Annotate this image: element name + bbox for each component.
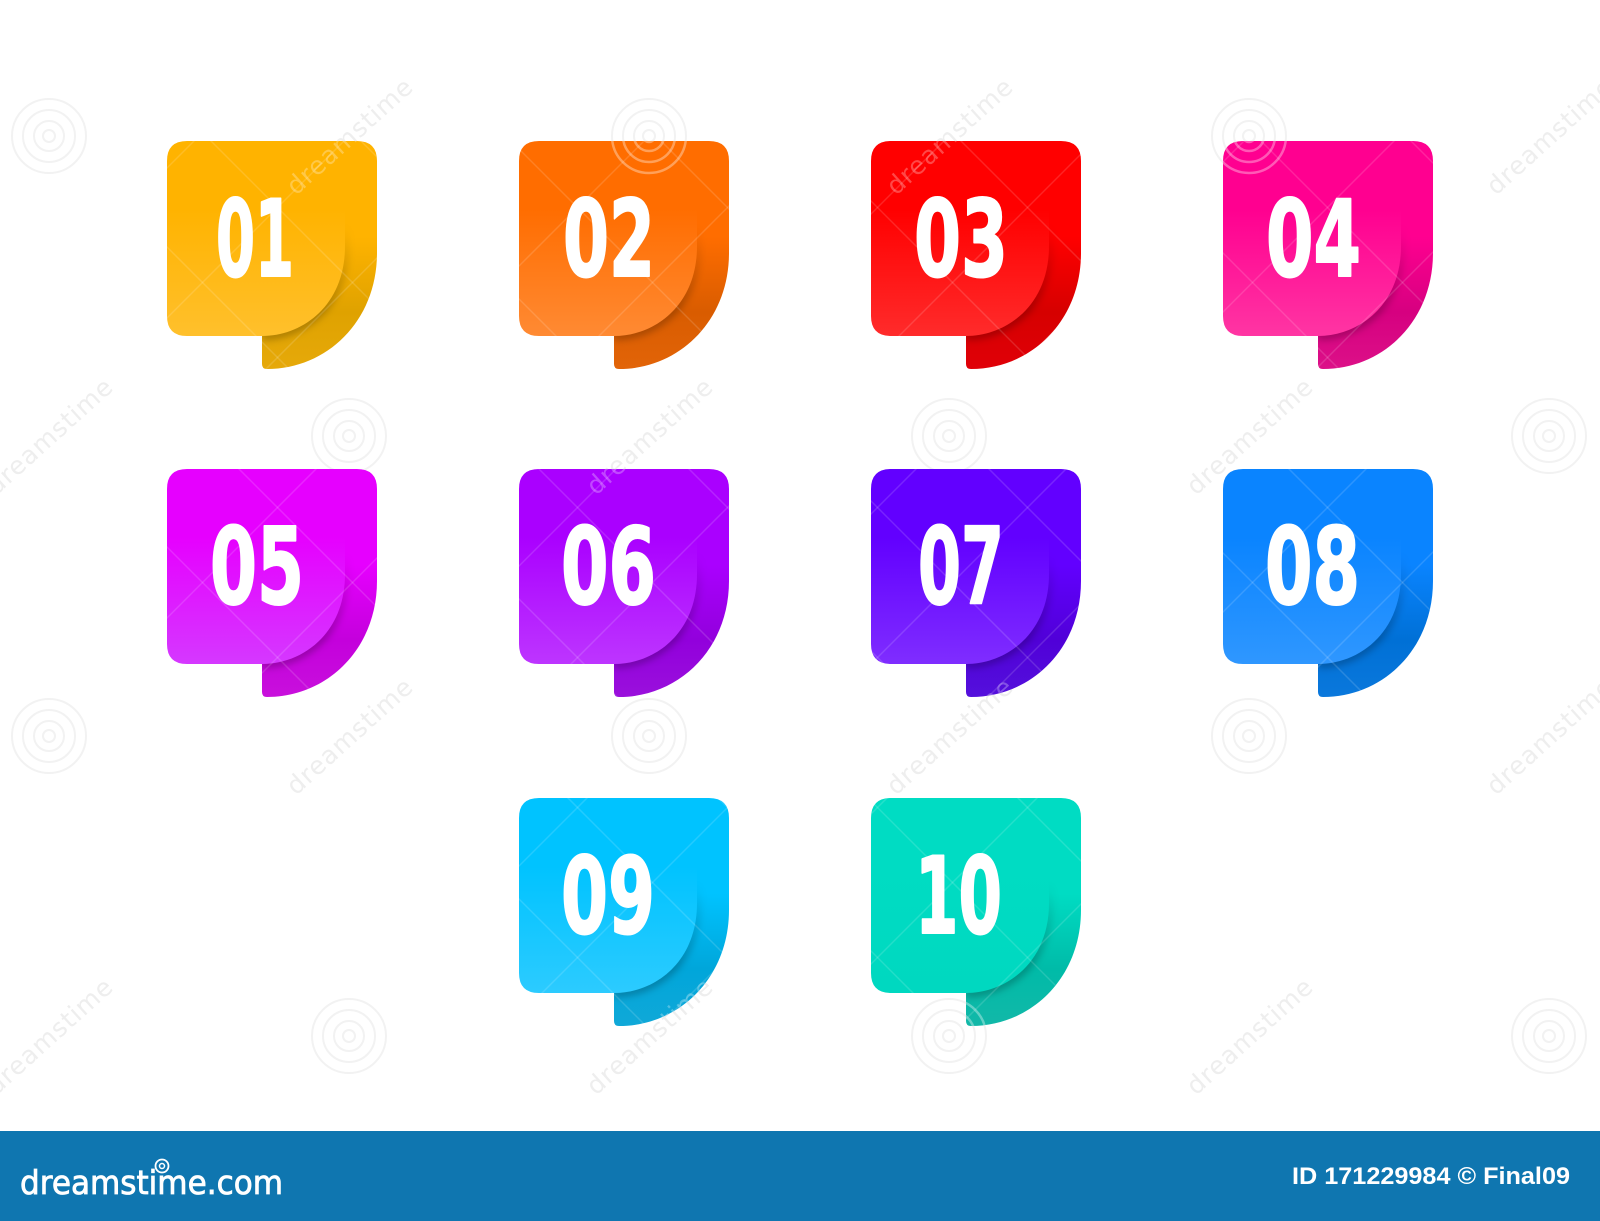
badge 09: [519, 798, 729, 1026]
background watermark: diagonal text: dreamstime: [1181, 372, 1319, 500]
badge 01: 01: [216, 178, 294, 301]
badge 10: 10: [915, 835, 1002, 958]
background watermark: diagonal text: dreamstime: [881, 72, 1019, 200]
badge 05: 05: [210, 506, 304, 628]
background watermark: diagonal text: dreamstime: [1181, 972, 1319, 1100]
footer bar: [0, 1131, 1600, 1221]
badge 02: [519, 141, 729, 369]
badge 06: 06: [561, 506, 656, 628]
badge 04: 04: [1266, 178, 1361, 301]
badge 02: 02: [563, 178, 655, 301]
badge 06: [519, 469, 729, 697]
background watermark: diagonal text: dreamstime: [581, 972, 719, 1100]
badge 05: [167, 469, 377, 697]
watermark overlay on badges: [167, 141, 1433, 1026]
badge 08: [1223, 469, 1433, 697]
background watermark: diagonal text: dreamstime: [881, 672, 1019, 800]
background watermark: diagonal text: dreamstime: [281, 672, 419, 800]
badge 04: [1223, 141, 1433, 369]
badge 03: 03: [914, 178, 1008, 301]
background watermark: diagonal text: dreamstime: [581, 372, 719, 500]
badge 07: 07: [918, 506, 1004, 628]
watermark overlay on badges: dreamstime: [281, 72, 419, 200]
badge 03: [871, 141, 1081, 369]
badge 01: [167, 141, 377, 369]
badge 10: [871, 798, 1081, 1026]
footer image id and credit: ID 171229984 © Final09: [1292, 1163, 1570, 1190]
footer logo: dreamstime.com: dreamstime.com: [20, 1163, 283, 1202]
badge 09: 09: [561, 835, 655, 958]
background watermark: diagonal text: dreamstime: [281, 72, 419, 200]
watermark overlay on badges: dreamstime: [581, 972, 719, 1100]
watermark overlay on badges: dreamstime: [881, 72, 1019, 200]
watermark overlay on badges: dreamstime: [881, 672, 1019, 800]
badge 07: [871, 469, 1081, 697]
background watermark: spirals: [12, 99, 1586, 1073]
badge 08: 08: [1265, 506, 1360, 628]
watermark overlay on badges: dreamstime: [581, 372, 719, 500]
